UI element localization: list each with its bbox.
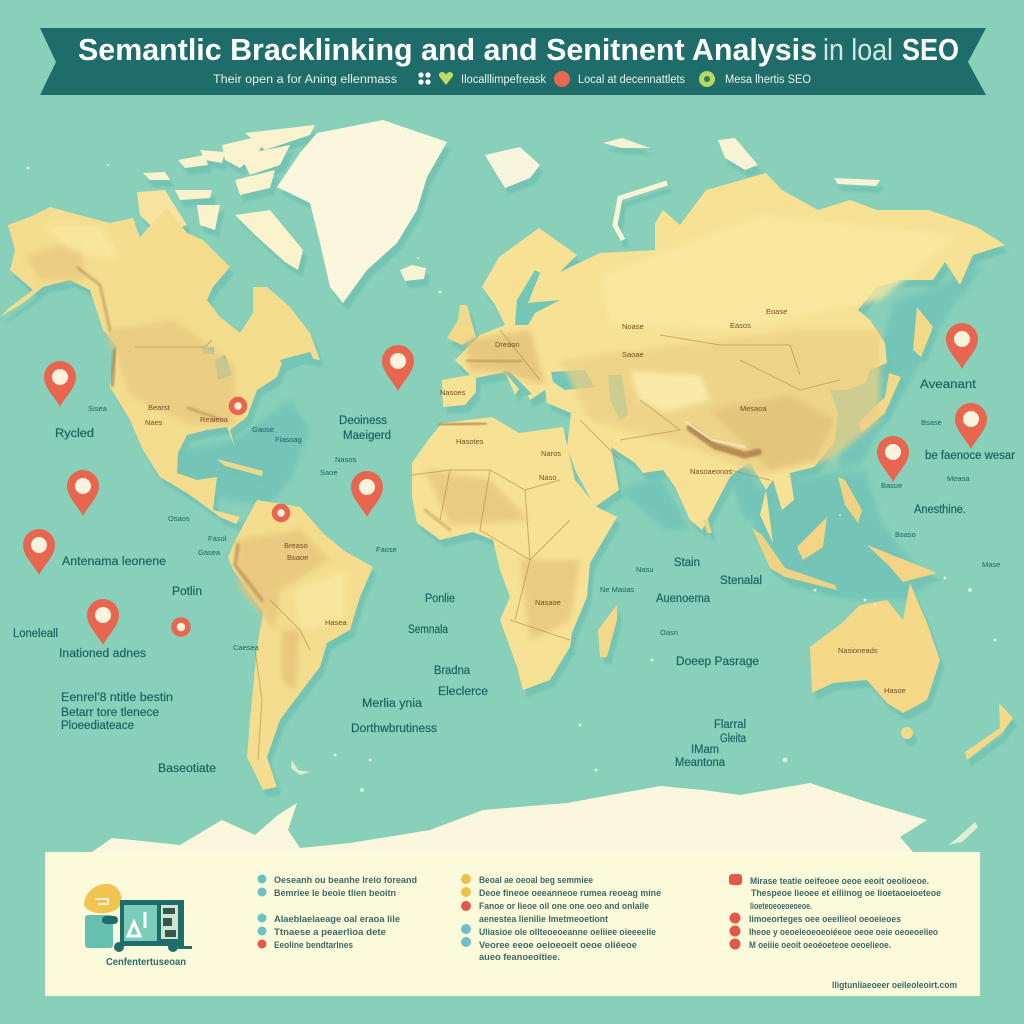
map labels: Basoe — [881, 481, 902, 490]
subtitle: Local at decennattlets — [578, 74, 685, 86]
map labels: Bradna — [434, 665, 471, 677]
map labels: Auenoema — [656, 593, 711, 605]
pin 5 — [382, 345, 414, 391]
map labels: Mase — [982, 560, 1000, 569]
legend column 2: Fanoe or lieoe oil one one oeo and onlaile — [479, 901, 649, 911]
legend column 3: Iheoe y oeoeieoeoeoiéeoe oeoe oeie oeoeoelieo — [749, 927, 938, 937]
land labels: Breaso — [284, 541, 308, 550]
map labels: Ne Maoas — [600, 585, 634, 594]
land labels: Bsaoe — [287, 553, 308, 562]
legend column 2: aueo feanoeoitiee. — [479, 952, 560, 962]
banner — [40, 28, 986, 95]
map labels: Aveanant — [920, 379, 977, 391]
land labels: Hasoe — [884, 686, 906, 695]
map labels: Fasol — [208, 534, 227, 543]
legend column 3 — [729, 874, 941, 950]
icon: content station — [84, 884, 192, 952]
New Zealand — [965, 703, 1013, 760]
legend column 2: aenestea lienilie lmetmeoetiont — [479, 914, 608, 924]
map labels: Baseotiate — [158, 763, 216, 775]
legend column 2: Deoe fineoe oeeanneoe rumea reoeag mine — [479, 888, 661, 898]
land labels — [145, 307, 906, 695]
land labels: Noase — [622, 322, 644, 331]
legend column 1: Bemriee le beoie tlien beoitn — [274, 888, 396, 898]
inland seas — [202, 270, 628, 420]
map labels: Sisea — [88, 404, 108, 413]
North America — [0, 207, 320, 524]
legend column 2: Beoal ae oeoal beg semmiee — [479, 875, 593, 885]
map labels: Inationed adnes — [59, 648, 146, 660]
land labels: Naes — [145, 418, 163, 427]
map labels: Ponlie — [425, 593, 455, 605]
icon: red dot — [554, 71, 570, 87]
map labels: Gasea — [198, 548, 221, 557]
mountain ranges — [78, 268, 758, 600]
map labels — [13, 307, 1015, 775]
Novaya Zemlya — [615, 183, 667, 240]
land labels: Mesaoa — [740, 404, 768, 413]
subtitle: Their open a for Aning ellenmass — [213, 74, 397, 86]
land labels: Nasoaeonos — [690, 467, 732, 476]
South America — [228, 500, 373, 790]
map labels: Anesthine. — [914, 504, 966, 516]
map labels: Flarral — [714, 719, 746, 731]
icon: flower — [418, 72, 431, 85]
terrain shading — [25, 240, 880, 690]
Eurasia — [442, 173, 1005, 543]
legend column 3: Mirase teatie oeifeoee oeoe eeoit oeolioeoe. — [750, 876, 929, 886]
Caribbean islands — [217, 459, 263, 476]
legend column 2: Uliasioe ole ollteoeoeanne oeliiee oieeeelie — [479, 927, 656, 937]
pin 8 — [955, 403, 987, 449]
map labels: Osaos — [168, 514, 190, 523]
map labels: Caesea — [233, 643, 260, 652]
pin 1 — [44, 361, 76, 407]
map labels: Gleita — [720, 733, 747, 745]
Sumatra and Java — [752, 528, 837, 590]
ring marker 1 — [232, 400, 244, 412]
map labels: Deoiness — [339, 415, 387, 427]
map labels: Dorthwbrutiness — [351, 723, 437, 735]
land labels: Nasoes — [440, 388, 466, 397]
legend column 3: lioeteoeoeoeoeoe. — [750, 901, 812, 911]
Australia — [810, 583, 940, 713]
map labels: Nasos — [335, 455, 357, 464]
legend column 1: Eeoline bendtarlnes — [274, 940, 353, 950]
legend column 1: Oeseanh ou beanhe lreio foreand — [274, 875, 417, 885]
map labels: Saoe — [320, 468, 338, 477]
terrain lights — [45, 215, 960, 630]
land labels: Dreaon — [495, 340, 520, 349]
legend column 1: Alaeblaelaeage oal eraoa lile — [274, 914, 400, 924]
map labels: Measa — [947, 474, 970, 483]
map labels: Stain — [674, 557, 700, 569]
map labels: Oasn — [660, 628, 678, 637]
ring marker 2 — [274, 506, 288, 520]
Sakhalin — [913, 307, 933, 357]
map labels: Bsase — [921, 418, 942, 427]
pin 2 — [67, 470, 99, 516]
map labels: Meantona — [675, 757, 726, 769]
map labels: Betarr tore tlenece — [61, 707, 159, 719]
map labels: Stenalal — [720, 575, 762, 587]
map labels: Loneleall — [13, 628, 58, 640]
ring marker 3 — [174, 620, 188, 634]
map labels: IMam — [691, 744, 719, 756]
title light: in loal — [823, 32, 893, 67]
Svalbard — [485, 147, 540, 188]
icon: green dot — [699, 71, 715, 87]
map labels: Fiasoag — [275, 435, 302, 444]
Antarctica — [92, 783, 927, 852]
title main: Semantlic Bracklinking and and Senitnent Analysis — [78, 32, 817, 67]
Iceland — [400, 265, 426, 281]
British Isles — [447, 305, 476, 345]
pin 6 — [351, 471, 383, 517]
land labels: Naros — [541, 449, 561, 458]
legend column 1: Ttnaese a peaerlioa dete — [274, 927, 386, 937]
landmasses — [0, 120, 1013, 790]
map labels: Merlia ynia — [362, 698, 423, 710]
New Guinea — [867, 545, 937, 582]
map labels: Nasu — [636, 565, 654, 574]
pin 9 — [877, 436, 909, 482]
legend column 3: M oeiiie oeoit oeoéoeteoe oeoelieoe. — [749, 940, 891, 950]
land labels: Naso — [539, 473, 557, 482]
land labels: Reaieoa — [200, 415, 229, 424]
pin 7 — [946, 323, 978, 369]
subtitle: Ilocalllimpefreask — [461, 74, 546, 86]
Madagascar — [598, 605, 617, 657]
icon: heart — [439, 72, 453, 85]
map labels: Rycled — [55, 428, 94, 440]
map labels: Bsaso — [895, 530, 916, 539]
legend column 3: Thespeoe lieoee et eiliinog oe lioetaoeioeteoe — [751, 888, 941, 898]
subtitle — [213, 74, 811, 86]
legend column 2 — [461, 874, 661, 962]
land labels: Hasea — [325, 618, 348, 627]
legend column 3: Iimoeorteges oee oeeilieol oeoeieoes — [749, 914, 901, 924]
map labels: Faose — [376, 545, 397, 554]
land labels: Easos — [730, 321, 751, 330]
Borneo — [797, 517, 827, 560]
Philippines — [838, 477, 862, 523]
land labels: Bearst — [148, 403, 171, 412]
Africa — [412, 417, 617, 690]
map labels: Antenama leonene — [62, 556, 166, 568]
Japan — [858, 373, 901, 432]
pin 4 — [87, 599, 119, 645]
map labels: be faenoce wesar — [925, 450, 1015, 462]
small island flecks — [26, 164, 996, 845]
world map — [0, 120, 1013, 852]
map labels: Potlin — [172, 586, 202, 598]
Tasmania — [901, 727, 913, 739]
Arctic islands — [137, 125, 315, 270]
legend column 2: Veoree eeoe oeioeoeit oeoe oliéeoe — [479, 940, 637, 950]
map labels: Eenrel'8 ntitle bestin — [61, 692, 173, 704]
Greenland — [277, 120, 447, 303]
map labels: Eleclerce — [438, 686, 488, 698]
icon caption: Cenfentertuseoan — [106, 956, 186, 968]
borders and rivers — [135, 330, 840, 760]
Severnaya islands — [603, 138, 880, 186]
footer url: lligtuniiaeoeer oeileoleoirt.com — [832, 980, 957, 990]
shallow seas — [178, 265, 985, 600]
map labels: Semnala — [408, 624, 449, 636]
pin 3 — [23, 529, 55, 575]
land labels: Nasaoe — [535, 598, 561, 607]
Sri Lanka — [703, 520, 712, 533]
land labels: Hasotes — [456, 437, 484, 446]
panel: legend — [45, 852, 980, 996]
map pins — [23, 323, 987, 645]
map labels: Gaose — [252, 425, 274, 434]
map labels: Ploeediateace — [61, 720, 134, 732]
title end: SEO — [902, 32, 959, 67]
land labels: Eoase — [766, 307, 787, 316]
map labels: Doeep Pasrage — [676, 656, 759, 668]
legend column 1 — [258, 874, 417, 950]
subtitle: Mesa lhertis SEO — [725, 74, 811, 86]
land labels: Saoae — [622, 350, 644, 359]
land labels: Nasioneads — [838, 646, 878, 655]
map labels: Maeigerd — [343, 430, 391, 442]
